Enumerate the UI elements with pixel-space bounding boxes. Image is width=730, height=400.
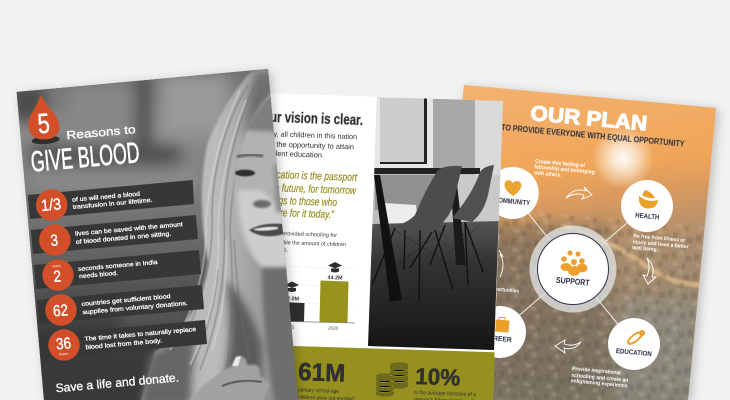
- stat text 4: [81, 293, 188, 316]
- node: community: [487, 167, 539, 219]
- stat row 3: every: [52, 264, 62, 268]
- chart caption: nearly double the amount of children: [258, 239, 346, 248]
- heading: our vision is clear: Our vision is clear.: [261, 110, 363, 129]
- eye: [235, 170, 255, 176]
- nose shadow: [253, 200, 271, 208]
- stat text 2: lives can be saved with the amount: [75, 221, 183, 238]
- icon: bowl: [639, 190, 658, 209]
- stat text 4: countries get sufficient blood: [81, 293, 171, 308]
- chart caption: since 2015.: [258, 247, 288, 254]
- stat text 5: The time it takes to naturally replace: [84, 326, 197, 343]
- stat row 5: hours: [59, 352, 69, 356]
- heading: reasons to: Reasons to: [66, 124, 136, 142]
- stat text: 61M: primary school-age: [298, 388, 339, 395]
- number: 5: 5: [36, 108, 51, 139]
- icon: people group: [560, 250, 588, 276]
- icon: briefcase: [495, 318, 509, 333]
- chart caption: India has provided schooling for: [258, 230, 337, 239]
- education description: Provide inspirational: [572, 366, 621, 376]
- support ring: [534, 230, 612, 308]
- photo: woman portrait: [10, 65, 305, 400]
- icon: heart: [504, 180, 522, 196]
- stat text: 61M: [298, 388, 354, 400]
- body text: Today, all children in this nation: [258, 129, 357, 141]
- quote: to the future, for tomorrow: [258, 182, 357, 197]
- stat row 3: 2: [53, 268, 62, 286]
- stat row 5: [40, 320, 207, 361]
- stat text 3: seconds someone in India: [78, 259, 159, 273]
- icon: blood drop with number: [28, 95, 60, 140]
- icon: graduation cap 2020: [328, 262, 342, 272]
- heading: our plan: OUR PLAN: [530, 102, 648, 136]
- label: community: COMMUNITY: [494, 197, 531, 207]
- node: support: [538, 234, 608, 304]
- stat text 3: needs blood.: [79, 270, 119, 280]
- icon: blood drop shadow: [31, 135, 60, 145]
- bar: 2015: [289, 302, 304, 322]
- stat row 1: [28, 180, 194, 221]
- closing line: Save a life and donate.: [55, 370, 179, 395]
- icon: safety pin: [626, 330, 644, 346]
- stats band: [293, 346, 495, 400]
- stat row 4: [37, 285, 204, 326]
- stat: 61M: 61M: [298, 358, 346, 388]
- health description: [631, 233, 690, 253]
- label: career: CAREER: [483, 335, 512, 344]
- body text: [274, 131, 357, 158]
- stat row 4: 62: [52, 302, 69, 320]
- node: career: [474, 306, 526, 358]
- stat row 1: 1/3: [40, 196, 62, 215]
- node: health: [621, 180, 673, 232]
- arrow: health to education: [643, 258, 656, 284]
- label: health: HEALTH: [635, 212, 660, 221]
- icon: coins: [376, 362, 408, 397]
- health description: injury and have a better: [633, 239, 690, 250]
- label: support: SUPPORT: [556, 275, 591, 288]
- panel: our plan poster: [461, 83, 723, 400]
- value: 2020: 44.2M: [327, 275, 343, 282]
- heading: give blood: GIVE BLOOD: [29, 137, 141, 179]
- node: education: [608, 318, 660, 370]
- neck: [262, 268, 305, 400]
- education description: schooling and create an: [571, 373, 628, 384]
- axis label: 2015: 2015: [284, 325, 295, 330]
- stat text 1: [72, 191, 153, 211]
- subheading: TO PROVIDE EVERYONE WITH EQUAL OPPORTUNITY: [501, 122, 685, 149]
- community description: [533, 159, 595, 179]
- community description: Create this feeling of: [535, 159, 585, 169]
- stat text 1: transfusion in our lifetime.: [73, 197, 153, 211]
- face: [233, 93, 286, 268]
- dark hair shading: [140, 72, 275, 400]
- stat text 2: of blood donated in one sitting.: [76, 230, 172, 246]
- stat text 5: [84, 326, 197, 351]
- education description: [571, 366, 629, 390]
- arrow: career to community: [499, 250, 503, 277]
- stat row 3: [34, 250, 201, 291]
- arrow: education to career: [555, 340, 581, 353]
- stat text 4: supplies from voluntary donations.: [82, 300, 188, 316]
- stat row 2: 3: [50, 232, 59, 250]
- axis label: 2020: 2020: [328, 326, 339, 331]
- stat row 5: 36: [55, 335, 72, 353]
- community description: fellowship and belonging: [534, 164, 595, 176]
- stat text 2: [75, 221, 183, 246]
- hand: [186, 356, 270, 400]
- panel: give blood poster: [10, 65, 305, 400]
- chart caption: [283, 232, 346, 252]
- quote: [278, 170, 358, 220]
- bar chart: [286, 262, 356, 330]
- health description: Be free from illness or: [633, 233, 686, 244]
- stat row 2: [31, 215, 198, 256]
- bar: 2020: [320, 280, 348, 322]
- quote: belongs to those who: [258, 194, 337, 209]
- stat text 3: [78, 259, 159, 280]
- stat text 5: blood lost from the body.: [85, 337, 163, 351]
- quote: "Education is the passport: [258, 169, 358, 184]
- photo: dining chairs: [364, 95, 507, 355]
- arrow: community to health: [566, 187, 592, 199]
- stat text 1: of us will need a blood: [72, 191, 140, 204]
- body text: excellent education.: [258, 148, 324, 160]
- education description: enlightening experience.: [571, 378, 629, 390]
- career description: opportunities: [489, 286, 519, 295]
- stat text: 10%: is the average increase of a: [414, 390, 477, 398]
- community description: with others.: [533, 170, 562, 179]
- value: 2015: 22.0M: [284, 296, 300, 303]
- panel: education vision poster: [257, 93, 507, 400]
- health description: well being.: [631, 245, 659, 253]
- lips: [249, 224, 284, 236]
- label: education: EDUCATION: [616, 348, 652, 358]
- body text: have the opportunity to attain: [258, 139, 354, 151]
- icon: graduation cap 2015: [288, 282, 299, 292]
- connector lines: [500, 193, 647, 344]
- quote: prepare for it today.": [257, 206, 335, 221]
- stat: 10%: 10%: [415, 363, 461, 391]
